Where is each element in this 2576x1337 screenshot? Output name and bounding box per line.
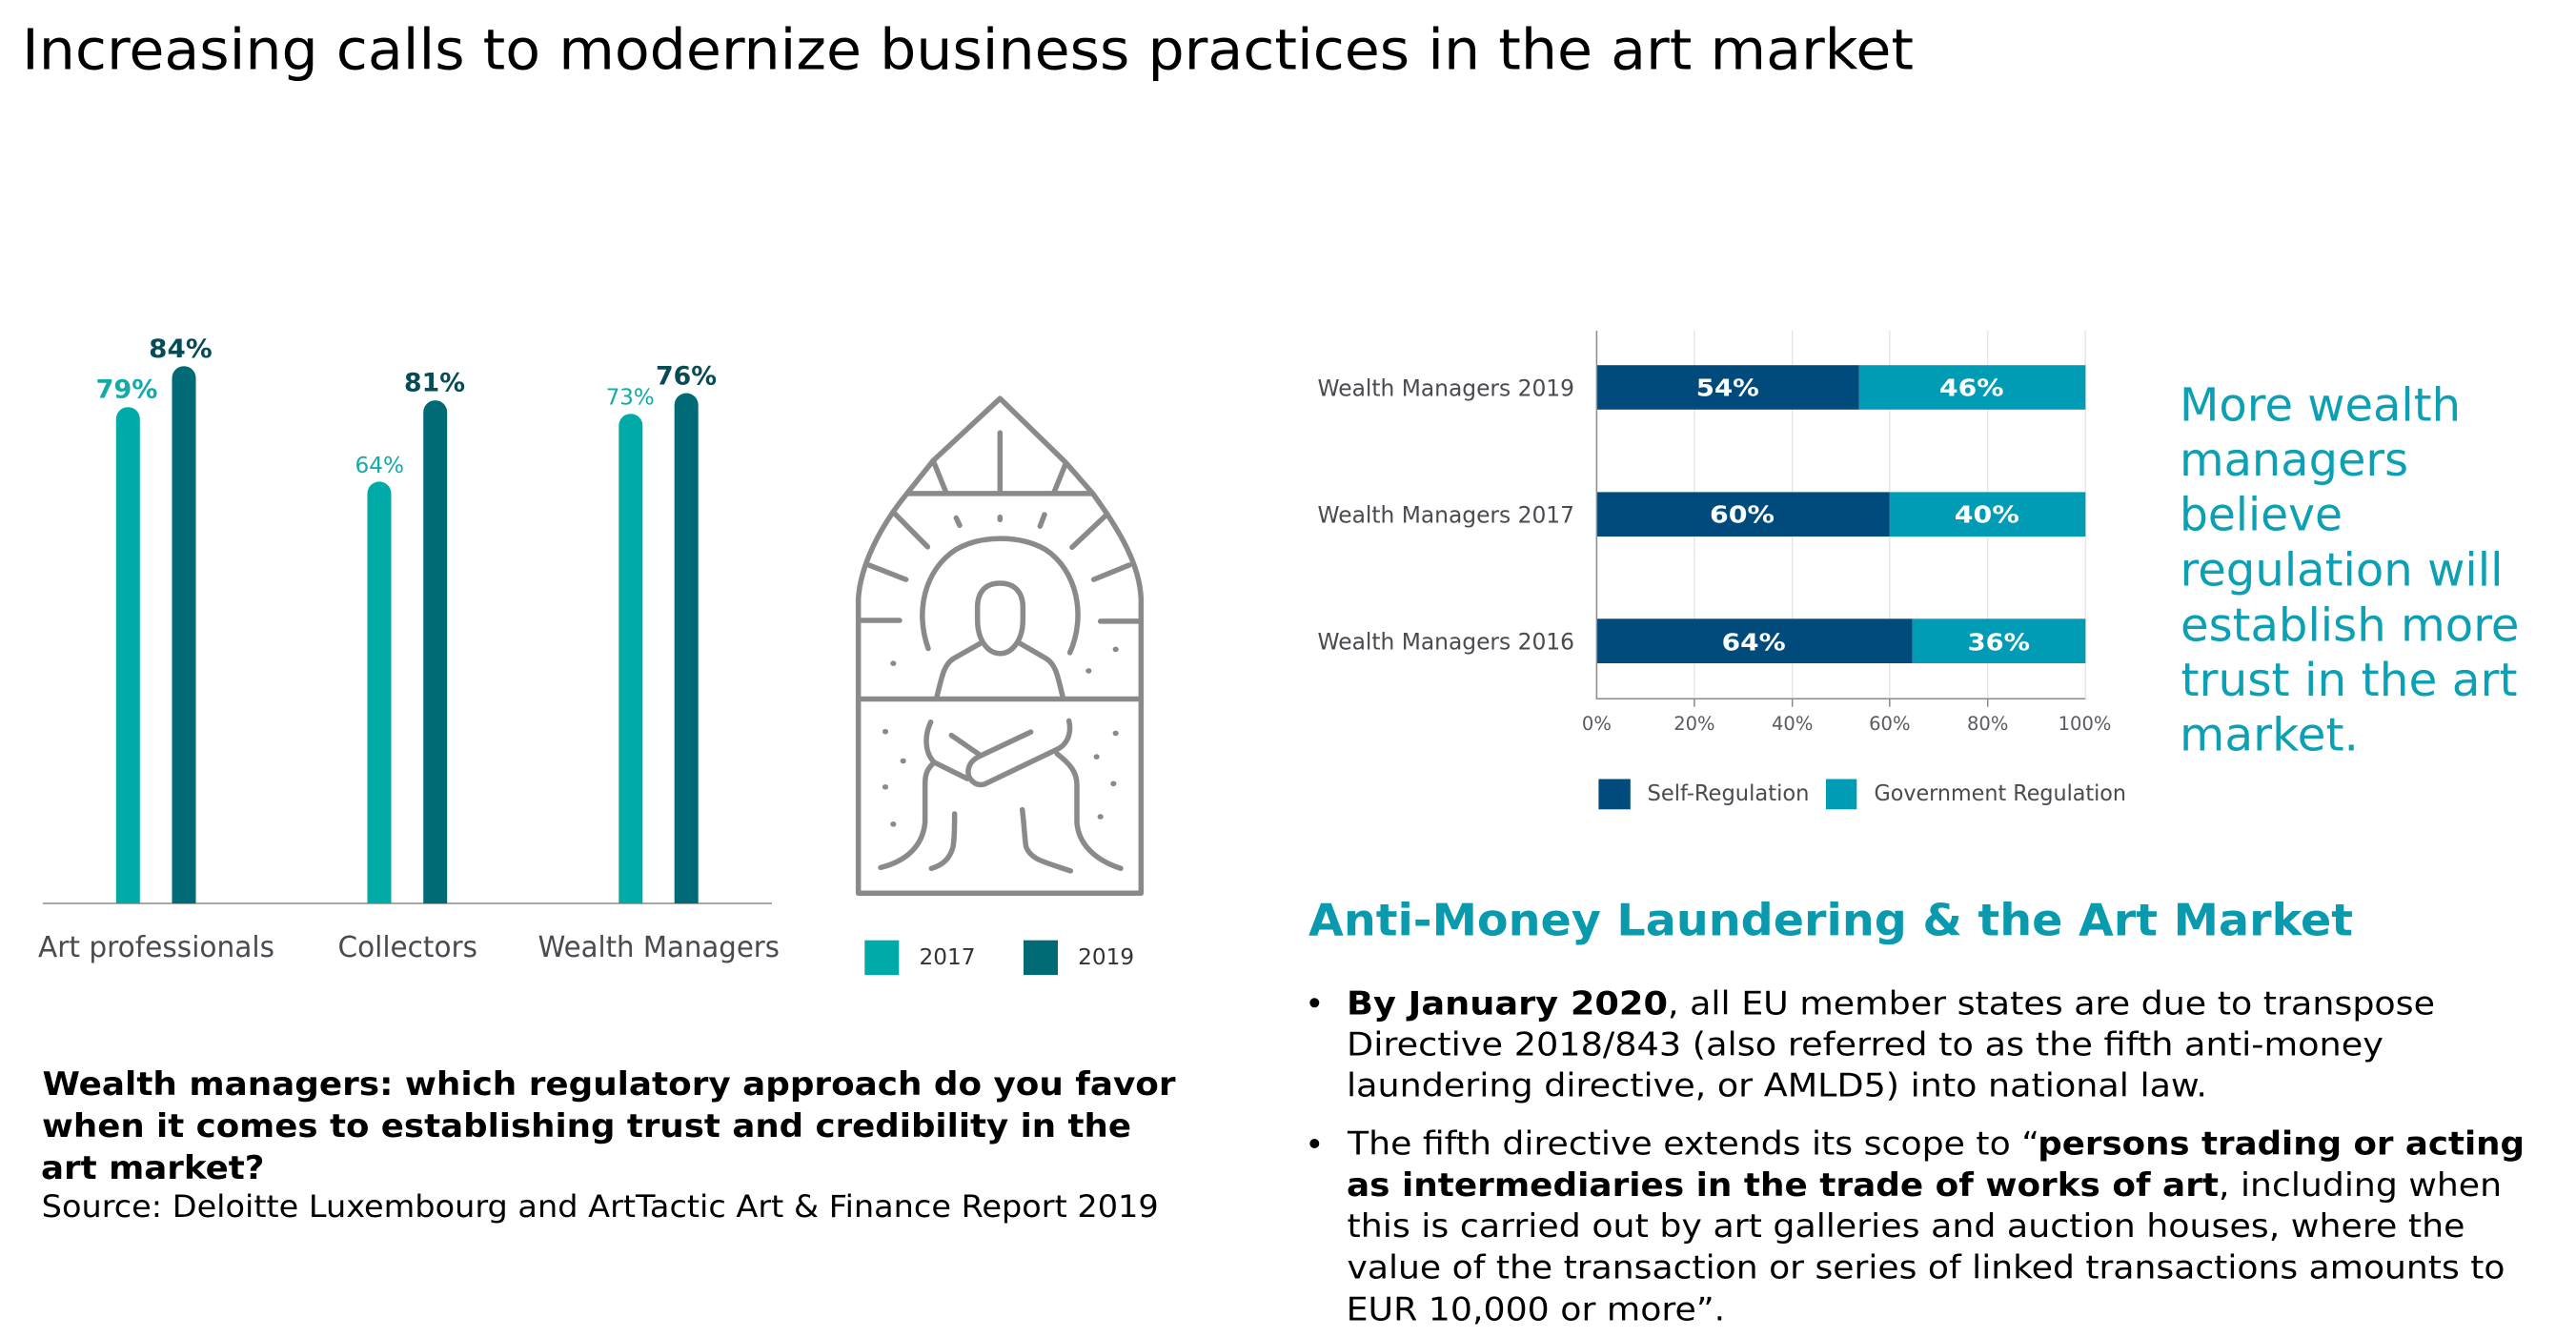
question text (41, 1065, 1176, 1187)
bar: Wealth Managers 2017 (1596, 492, 2085, 537)
value: 76%: 76% (656, 362, 717, 392)
bar: Art professionals 2019 (172, 366, 196, 903)
axis labels: 20% (1673, 713, 1715, 735)
bar: Wealth Managers 2016: 64% (1722, 628, 1786, 656)
bar: Wealth Managers 2017 (619, 414, 642, 903)
callout: more wealth managers: regulation will (2180, 543, 2503, 597)
legend swatch 2017 (864, 941, 899, 975)
row labels: Wealth Managers 2017 (1317, 501, 1574, 528)
legend swatch 2019 (1024, 941, 1058, 975)
bar: Wealth Managers 2019: 54% (1696, 375, 1759, 402)
value: 79%: 79% (95, 375, 158, 404)
row labels: Wealth Managers 2016 (1317, 629, 1574, 656)
callout: more wealth managers (2180, 379, 2520, 761)
bar: Collectors 2019 (423, 400, 447, 903)
legend: regulation type (1598, 780, 2126, 809)
bullet: fifth directive: as intermediaries in the trade of works of art (1347, 1166, 2219, 1205)
callout: more wealth managers: trust in the art (2180, 654, 2518, 707)
bullet: January 2020 (1309, 984, 2435, 1105)
value: 64%: 64% (355, 454, 404, 478)
icon: stained glass window with figure (859, 398, 1141, 893)
label government regulation: Government Regulation (1874, 781, 2126, 806)
axis labels: 80% (1967, 713, 2008, 735)
value: 73%: 73% (606, 385, 655, 410)
heading: Anti-Money Laundering: Anti-Money Laundering & the Art Market (1308, 895, 2353, 946)
bar: Wealth Managers 2017: 40% (1955, 501, 2019, 529)
bar: Wealth Managers 2019: 46% (1939, 375, 2003, 402)
label self-regulation: Self-Regulation (1647, 781, 1809, 806)
bar: Wealth Managers 2016 (1596, 618, 2085, 663)
bullet: January 2020: , all EU member states are due to transpose (1668, 984, 2435, 1023)
bullet: fifth directive: The fifth directive extends its scope to “ (1347, 1125, 2039, 1164)
category: Collectors: Collectors (337, 931, 477, 964)
row labels: Wealth Managers 2019 (1317, 375, 1574, 402)
callout: more wealth managers: More wealth (2180, 379, 2461, 433)
bullet: January 2020: Directive 2018/843 (also referred to as the fifth anti-money (1347, 1025, 2383, 1064)
bullet: fifth directive: value of the transaction or series of linked transactions amounts to (1348, 1249, 2505, 1287)
legend label 2017: 2017 (919, 945, 976, 970)
bar: Art professionals 2017 (116, 407, 140, 903)
callout: more wealth managers: managers (2180, 434, 2408, 487)
stacked bar chart: regulation preference (1317, 331, 2111, 735)
axis labels (1582, 713, 2111, 735)
bar: Collectors 2017 (368, 481, 391, 903)
question text: Wealth managers: which regulatory approach do you favor (42, 1065, 1176, 1104)
bullet: fifth directive: , including when (2219, 1166, 2502, 1205)
title: Increasing calls to modernize business practices in the art market (22, 17, 1914, 83)
survey question and source (41, 1065, 1176, 1225)
row labels (1317, 375, 1574, 656)
bullet: fifth directive: this is carried out by art galleries and auction houses, where the (1348, 1207, 2464, 1246)
legend: years (864, 941, 1134, 975)
axis labels: 0% (1582, 713, 1612, 735)
category: Wealth Managers: Wealth Managers (538, 931, 780, 964)
category: Art professionals: Art professionals (38, 931, 274, 964)
bullet: January 2020: laundering directive, or AMLD5) into national law. (1347, 1067, 2207, 1105)
bullet: fifth directive (1309, 1125, 2525, 1329)
axis labels: 100% (2059, 713, 2111, 735)
value: 84%: 84% (149, 334, 213, 364)
legend label 2019: 2019 (1078, 945, 1134, 970)
bar: Wealth Managers 2016: 36% (1968, 628, 2030, 656)
swatch self-regulation (1598, 780, 1631, 809)
bullet: fifth directive: persons trading or acting (2038, 1125, 2525, 1164)
callout: more wealth managers: establish more (2180, 598, 2520, 652)
callout: more wealth managers: believe (2180, 489, 2343, 542)
source line: Source: Deloitte Luxembourg and ArtTactic Art & Finance Report 2019 (42, 1188, 1159, 1225)
bar: Wealth Managers 2019 (675, 393, 699, 903)
value: 81%: 81% (404, 368, 465, 398)
bullet: fifth directive: EUR 10,000 or more”. (1347, 1291, 1725, 1329)
axis labels: 60% (1869, 713, 1910, 735)
swatch government regulation (1826, 780, 1856, 809)
bar chart: agreement by respondent group (38, 334, 780, 964)
bar: Wealth Managers 2019 (1596, 365, 2085, 410)
axis labels: 40% (1772, 713, 1813, 735)
question text: art market? (41, 1149, 265, 1187)
bar: Wealth Managers 2017: 60% (1710, 501, 1775, 529)
callout: more wealth managers: market. (2180, 708, 2359, 761)
question text: when it comes to establishing trust and credibility in the (42, 1107, 1131, 1145)
bullet: January 2020: By January 2020 (1347, 984, 1668, 1023)
